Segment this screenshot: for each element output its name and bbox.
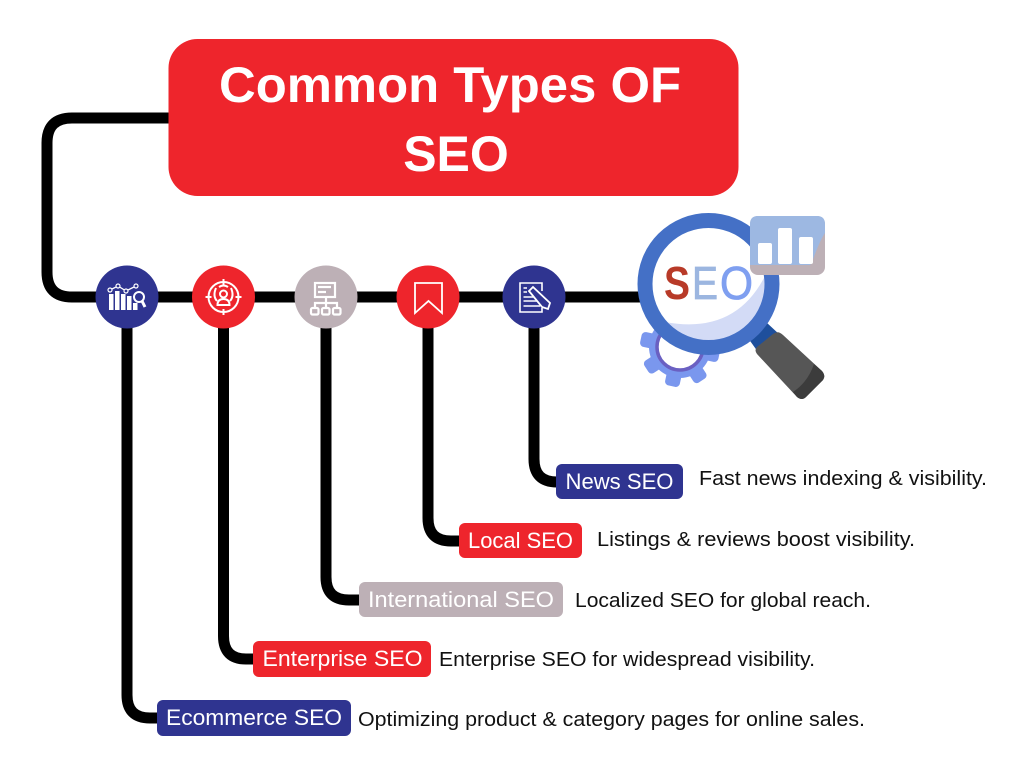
label: Ecommerce SEO: Ecommerce SEO [166, 705, 342, 730]
SEO word [664, 257, 753, 309]
label: Enterprise SEO [253, 641, 431, 677]
lens [638, 214, 778, 354]
label: Ecommerce SEO [157, 700, 351, 736]
SEO word: O [720, 257, 753, 309]
icon: international sitemap [294, 266, 358, 328]
connector lines [47, 118, 645, 718]
title banner [168, 39, 738, 196]
label: News SEO [556, 464, 683, 499]
description: International SEO: Localized SEO for global reach. [575, 590, 871, 612]
label: Local SEO: Local SEO [468, 528, 573, 553]
icon: SEO magnifying glass [638, 214, 825, 399]
icon: local bookmark [396, 266, 460, 328]
gear [639, 306, 721, 388]
SEO word: S [664, 257, 690, 309]
icon: news document [502, 266, 566, 328]
chart card [750, 216, 825, 275]
description: Ecommerce SEO: Optimizing product & category pages for online sales. [358, 709, 865, 731]
title banner: SEO [403, 126, 509, 182]
description: Local SEO: Listings & reviews boost visibility. [597, 529, 915, 551]
label: News SEO: News SEO [566, 469, 674, 494]
handle [748, 322, 824, 399]
label: Local SEO [459, 523, 582, 558]
label: Enterprise SEO: Enterprise SEO [262, 646, 422, 671]
title banner: Common Types OF [219, 57, 681, 113]
icon: enterprise target [192, 266, 255, 328]
SEO word: E [692, 257, 718, 309]
icon: ecommerce analytics [96, 266, 158, 328]
label: International SEO [359, 582, 563, 617]
label: International SEO: International SEO [368, 587, 554, 612]
description: News SEO: Fast news indexing & visibility. [699, 468, 987, 490]
description: Enterprise SEO: Enterprise SEO for widespread visibility. [439, 649, 815, 671]
